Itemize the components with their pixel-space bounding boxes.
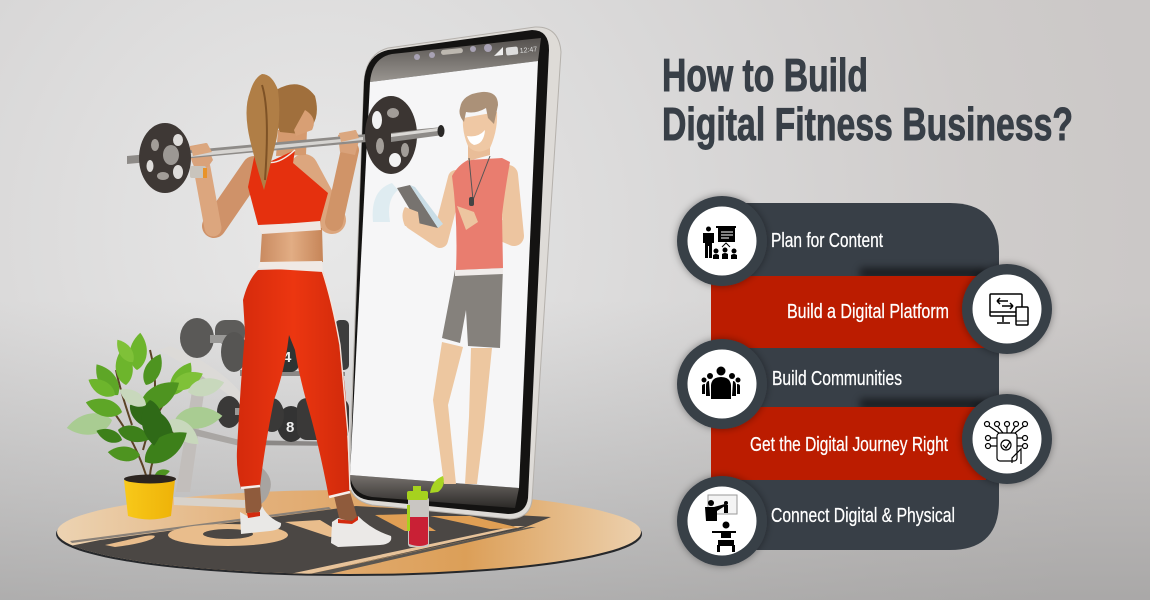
trainer: [373, 92, 514, 484]
icon: presentation: [677, 196, 767, 286]
phone status bar: 12:47: [519, 46, 538, 55]
step 1: plan for content: [677, 196, 883, 286]
left arm: [202, 168, 254, 228]
tablet: [397, 185, 438, 228]
icon: group of people: [677, 339, 767, 429]
neck: [276, 130, 307, 156]
arms: [413, 175, 514, 240]
label: Connect Digital & Physical: [771, 505, 955, 527]
band: get the digital journey right: [711, 399, 986, 480]
right arm: [304, 150, 350, 222]
step 5: connect digital & physical: [677, 476, 955, 566]
right plate: [365, 96, 444, 174]
fingers over bar: [191, 143, 212, 156]
crop top: [248, 150, 328, 225]
band: build a digital platform: [711, 268, 986, 348]
woman lifting barbell: [127, 74, 444, 547]
step 2: build a digital platform: [787, 264, 1052, 354]
phone screen: [350, 61, 538, 488]
whistle cord: [469, 156, 490, 200]
hair: [460, 92, 498, 124]
barbell: [127, 96, 444, 193]
torso: [452, 158, 510, 270]
hips and back: [260, 228, 323, 264]
title: How to Build: [662, 49, 868, 101]
panel: dark backing: [725, 203, 999, 550]
pot: [124, 480, 175, 520]
phone body: [349, 27, 561, 519]
step 3: build communities: [677, 339, 902, 429]
shoes: [240, 506, 281, 534]
label: Build Communities: [772, 368, 902, 390]
label: Build a Digital Platform: [787, 301, 949, 323]
title: [662, 49, 1073, 150]
water bottle: [407, 476, 444, 547]
phone status bar: [414, 44, 538, 60]
shorts: [442, 268, 503, 348]
head and hair: [274, 84, 317, 134]
dumbbell rack: 8: [286, 419, 294, 436]
waistband: [258, 261, 323, 272]
icon: devices: [962, 264, 1052, 354]
legs: [433, 342, 463, 484]
phone with trainer on screen: [349, 27, 561, 519]
head: [463, 112, 497, 152]
steps list: [677, 196, 1052, 566]
calves: [244, 486, 262, 513]
dumbbell rack: 4: [283, 349, 292, 366]
neck: [468, 135, 490, 161]
hands: [190, 143, 213, 168]
leggings: [237, 268, 350, 498]
phone bezel: [350, 30, 549, 514]
plant in yellow pot: [65, 332, 226, 520]
left plate: [139, 123, 191, 193]
icon: teacher and student: [677, 476, 767, 566]
dumbbell rack: [159, 318, 349, 508]
label: Get the Digital Journey Right: [750, 434, 948, 456]
platform: round gym floor: [56, 490, 642, 578]
step 4: get the digital journey right: [750, 394, 1052, 484]
icon: digital journey on phone: [962, 394, 1052, 484]
label: Plan for Content: [771, 230, 883, 252]
